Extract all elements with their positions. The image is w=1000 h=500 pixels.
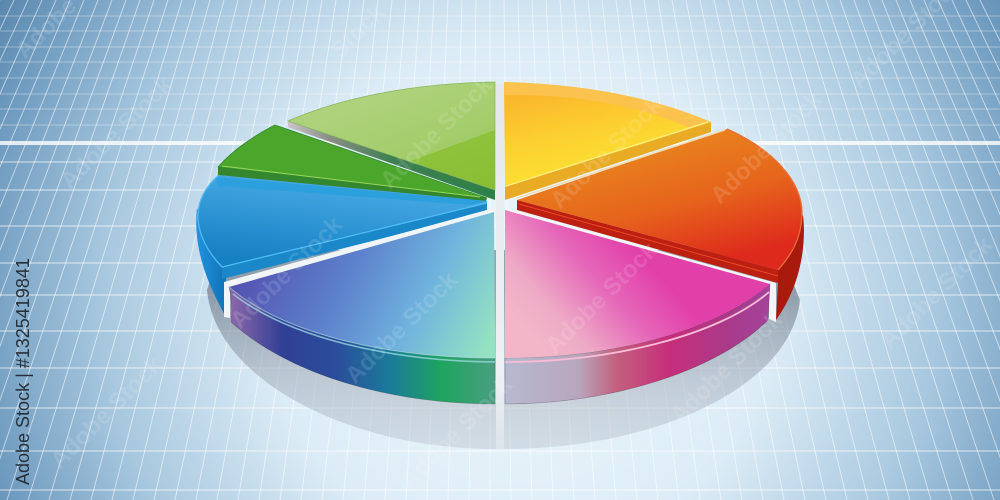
slice: violet to teal xyxy=(229,212,495,404)
reflection shadow under pie xyxy=(207,250,800,449)
slice: yellow xyxy=(504,82,711,200)
pie chart xyxy=(196,82,804,404)
watermarks: Adobe Stock: Adobe Stock xyxy=(340,266,463,389)
white divider: pink / red xyxy=(505,208,776,322)
central gap between slices xyxy=(496,84,504,450)
watermarks: Adobe Stock: Adobe Stock xyxy=(225,211,348,334)
watermarks: Adobe Stock: Adobe Stock xyxy=(395,371,518,494)
watermarks: Adobe Stock: Adobe Stock xyxy=(705,86,828,209)
white divider: blue / violet xyxy=(224,208,494,318)
watermarks: Adobe Stock: Adobe Stock xyxy=(875,231,998,354)
watermarks: Adobe Stock: Adobe Stock xyxy=(375,71,498,194)
watermarks: Adobe Stock: Adobe Stock xyxy=(540,236,663,359)
horizon line xyxy=(0,141,1000,145)
watermarks: Adobe Stock: Adobe Stock xyxy=(55,71,178,194)
watermarks: Adobe Stock: Adobe Stock xyxy=(665,306,788,429)
slice: orange to red xyxy=(517,129,804,320)
watermarks: Adobe Stock: Stock xyxy=(325,0,391,64)
slice: pink xyxy=(505,210,770,404)
slice: blue xyxy=(196,175,487,317)
slice: light green xyxy=(288,82,495,200)
stock ID label: Adobe Stock | #1325419841 xyxy=(13,258,33,485)
watermarks: Adobe Stock: Adobe Stock xyxy=(545,91,668,214)
watermarks: Adobe Stock: Adobe Stock xyxy=(45,351,168,474)
slice: dark green xyxy=(218,125,487,204)
